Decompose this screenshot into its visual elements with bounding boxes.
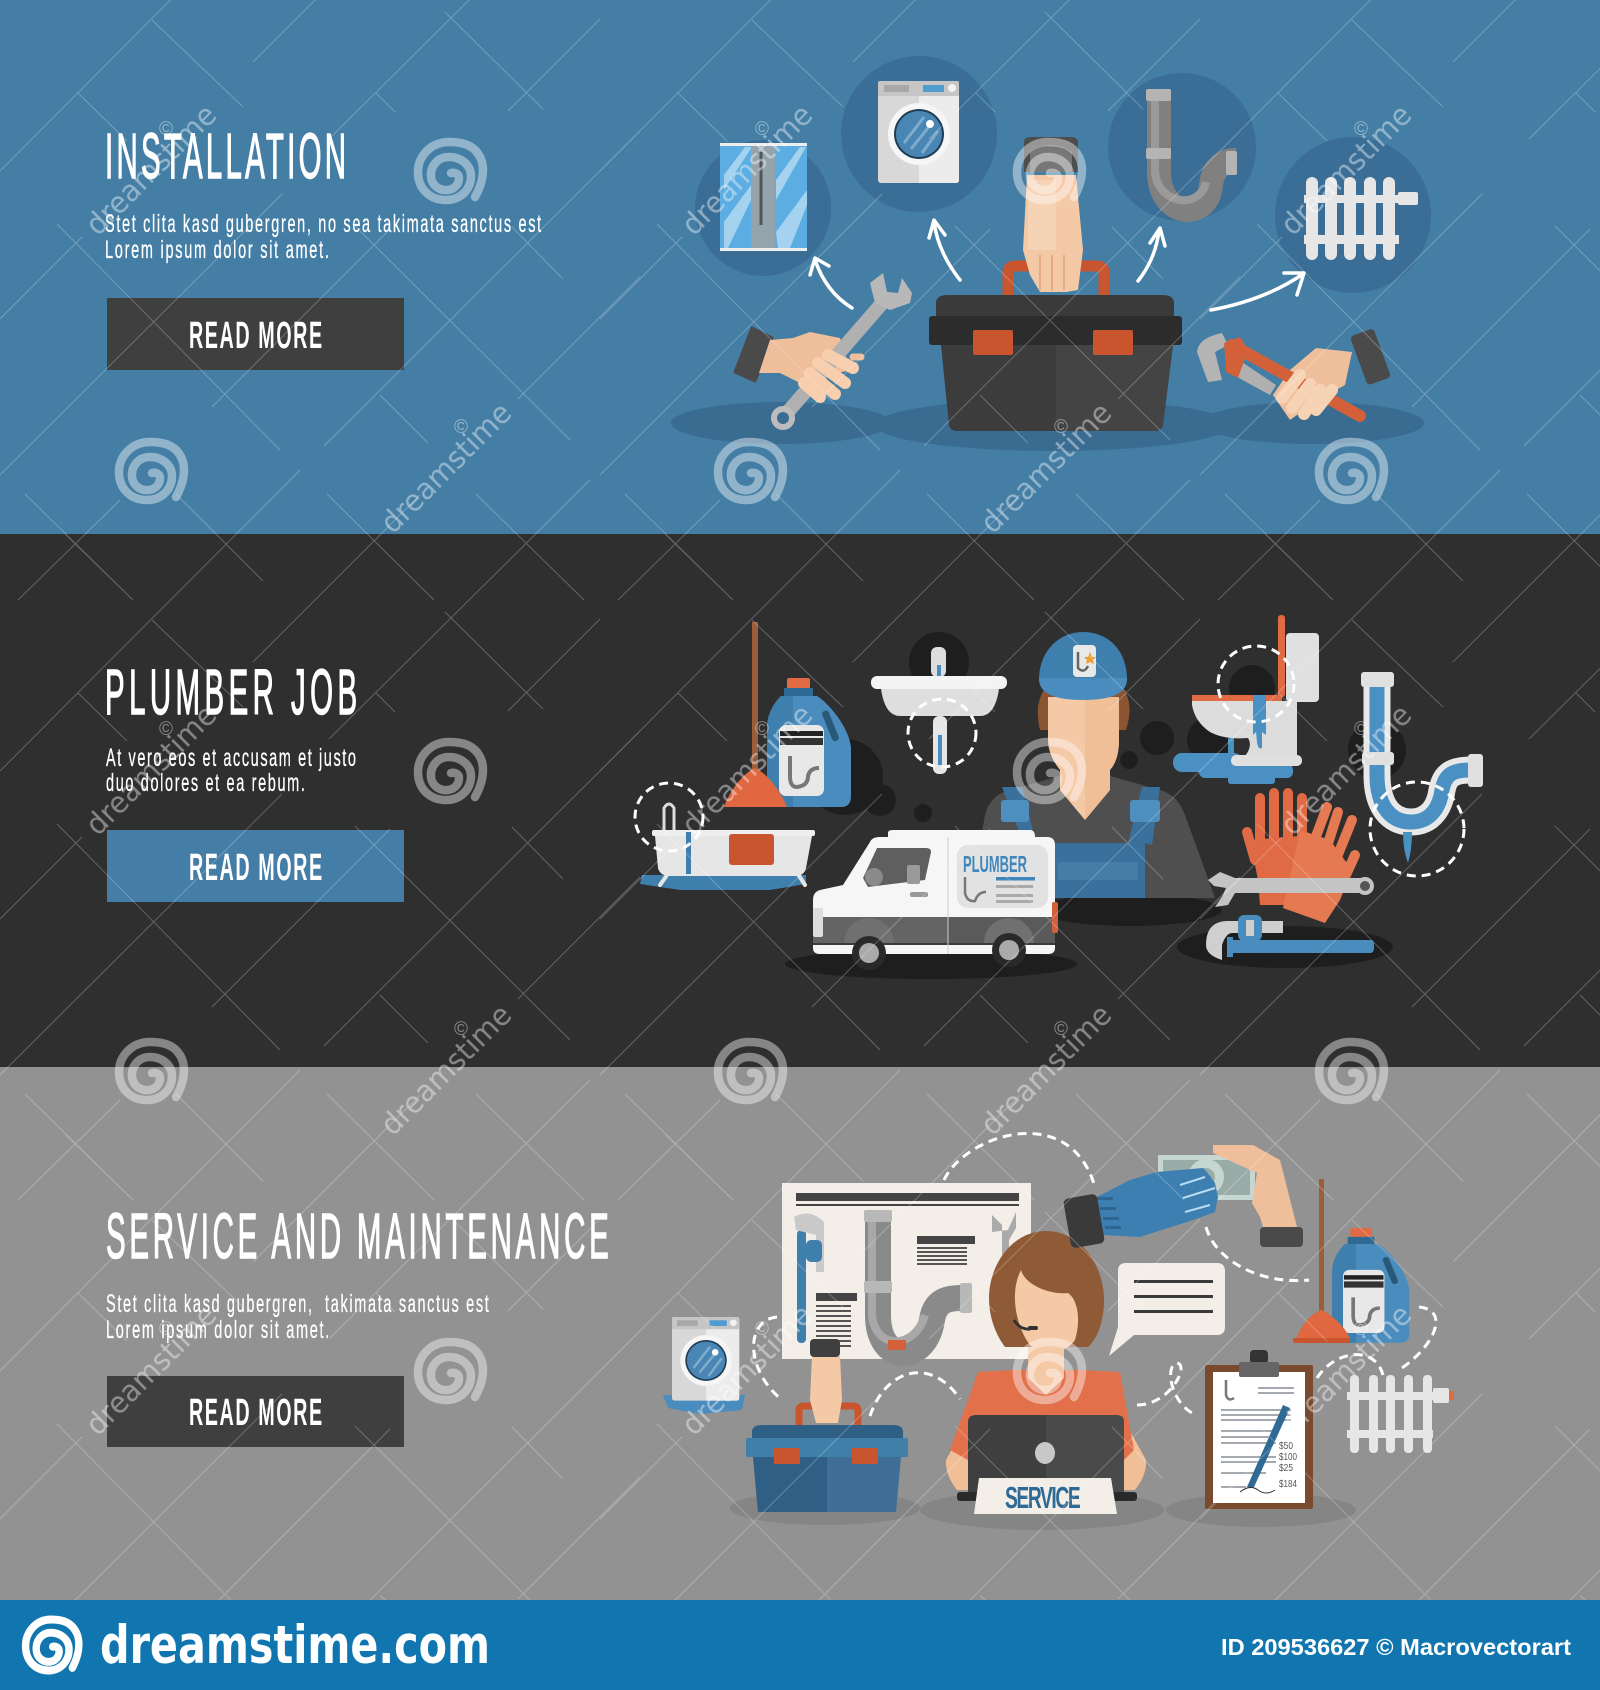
panel background — [0, 1067, 1600, 1600]
icon: cleaner bottle — [767, 678, 851, 807]
watermark text: dreamstime — [675, 1298, 819, 1442]
watermark text: dreamstime — [79, 1298, 223, 1442]
description — [106, 1291, 489, 1344]
operator woman with laptop — [946, 1231, 1146, 1515]
button: read more: READ MORE — [189, 1392, 322, 1434]
watermark text: dreamstime — [1274, 98, 1418, 242]
watermark copyright marks: © — [454, 1019, 468, 1040]
watermark copyright marks — [159, 119, 1368, 1340]
watermark copyright marks: © — [1054, 417, 1068, 438]
footer background — [0, 1600, 1600, 1690]
watermark copyright marks: © — [1054, 1019, 1068, 1040]
icon: washing machine — [663, 1317, 745, 1414]
watermark text: dreamstime — [675, 98, 819, 242]
button: read more: READ MORE — [189, 315, 322, 357]
watermark text: dreamstime — [374, 998, 518, 1142]
description: duo dolores et ea rebum. — [106, 770, 305, 797]
watermark copyright marks: © — [159, 119, 173, 140]
button: read more: READ MORE — [189, 847, 322, 889]
watermark text: dreamstime — [974, 396, 1118, 540]
watermark text: dreamstime — [1274, 1298, 1418, 1442]
description: Stet clita kasd gubergren, no sea takimata sanctus est — [105, 211, 541, 238]
icon: shower — [695, 140, 831, 276]
floor shadows — [671, 399, 1424, 451]
icon: bathtub — [635, 783, 815, 890]
panel: plumber job — [0, 534, 1600, 1067]
description: Lorem ipsum dolor sit amet. — [106, 1317, 329, 1344]
plumbing instruction board — [782, 1183, 1031, 1359]
panel: service and maintenance — [0, 1067, 1600, 1600]
icon: pipe trap — [1108, 73, 1256, 221]
footer bar — [0, 1600, 1600, 1690]
watermark copyright marks: © — [755, 719, 769, 740]
watermark text: dreamstime — [1274, 698, 1418, 842]
icon: radiator — [1347, 1375, 1454, 1453]
icon: radiator — [1275, 137, 1431, 293]
icon: invoice clipboard — [1205, 1350, 1313, 1509]
icon: invoice clipboard: $50 — [1279, 1441, 1293, 1452]
button: read more — [107, 298, 404, 370]
illustration: toolbox and tools — [671, 56, 1431, 451]
dashed connectors — [754, 1133, 1436, 1416]
speech bubble — [1109, 1263, 1225, 1356]
watermark copyright marks: © — [755, 1319, 769, 1340]
delivery van — [813, 830, 1058, 970]
watermark copyright marks: © — [755, 119, 769, 140]
watermark copyright marks: © — [1354, 1319, 1368, 1340]
title: INSTALLATION — [105, 120, 346, 192]
watermark copyright marks: © — [454, 417, 468, 438]
watermark copyright marks: © — [1354, 719, 1368, 740]
title: SERVICE AND MAINTENANCE — [106, 1200, 609, 1272]
icon: blue toolbox with hand — [746, 1339, 908, 1512]
icon: pipe wrench — [1206, 915, 1374, 960]
description — [106, 745, 356, 797]
delivery van: PLUMBER — [963, 851, 1027, 877]
illustration: service desk — [663, 1133, 1454, 1530]
hands exchanging money — [1063, 1145, 1303, 1249]
icon: invoice clipboard: $25 — [1279, 1463, 1293, 1474]
hand with pipe wrench — [1197, 328, 1391, 420]
icon: invoice clipboard: $100 — [1279, 1452, 1297, 1463]
arrows — [810, 220, 1304, 310]
image id and credit: ID 209536627 © Macrovectorart — [1221, 1634, 1571, 1660]
description: Lorem ipsum dolor sit amet. — [105, 237, 329, 264]
icon: plunger — [752, 622, 758, 772]
dark background blobs and shadows — [785, 632, 1406, 979]
watermark copyright marks: © — [1354, 119, 1368, 140]
title: PLUMBER JOB — [105, 656, 357, 728]
description: Stet clita kasd gubergren, takimata sanctus est — [106, 1291, 489, 1318]
icon: toilet — [1173, 615, 1319, 784]
watermark text — [79, 98, 1418, 1442]
panel: installation — [0, 0, 1600, 534]
toolbox — [929, 266, 1182, 431]
watermark spirals — [119, 142, 1384, 1400]
footer logo text: dreamstime.com — [100, 1615, 490, 1676]
watermark text: dreamstime — [79, 698, 223, 842]
icon: sink — [871, 647, 1007, 774]
hand holding toolbox — [1023, 137, 1083, 292]
plumber figure — [971, 632, 1215, 898]
icon: dreamstime logo spiral — [26, 1619, 79, 1671]
watermark text: dreamstime — [374, 396, 518, 540]
button: read more — [107, 830, 404, 902]
icon: plunger and bottle — [1293, 1179, 1409, 1343]
description: At vero eos et accusam et justo — [106, 745, 356, 772]
watermark text: dreamstime — [974, 998, 1118, 1142]
watermark text: dreamstime — [79, 98, 223, 242]
icon: leaking pipe — [1361, 672, 1483, 876]
icon: gloves — [1247, 793, 1355, 923]
operator woman with laptop: SERVICE — [1005, 1482, 1081, 1515]
floor shadows — [730, 1490, 1356, 1530]
panel background — [0, 534, 1600, 1067]
watermark copyright marks: © — [159, 1319, 173, 1340]
description — [105, 211, 541, 264]
icon: plunger cup — [724, 768, 787, 807]
icon: washing machine — [841, 56, 997, 212]
button: read more — [107, 1376, 404, 1447]
panel background — [0, 0, 1600, 534]
watermark text: dreamstime — [675, 698, 819, 842]
icon: wrench — [1208, 872, 1374, 907]
watermark copyright marks: © — [159, 719, 173, 740]
illustration: plumber and equipment — [635, 615, 1483, 979]
hand with wrench — [735, 273, 912, 427]
icon: invoice clipboard: $184 — [1279, 1479, 1297, 1490]
